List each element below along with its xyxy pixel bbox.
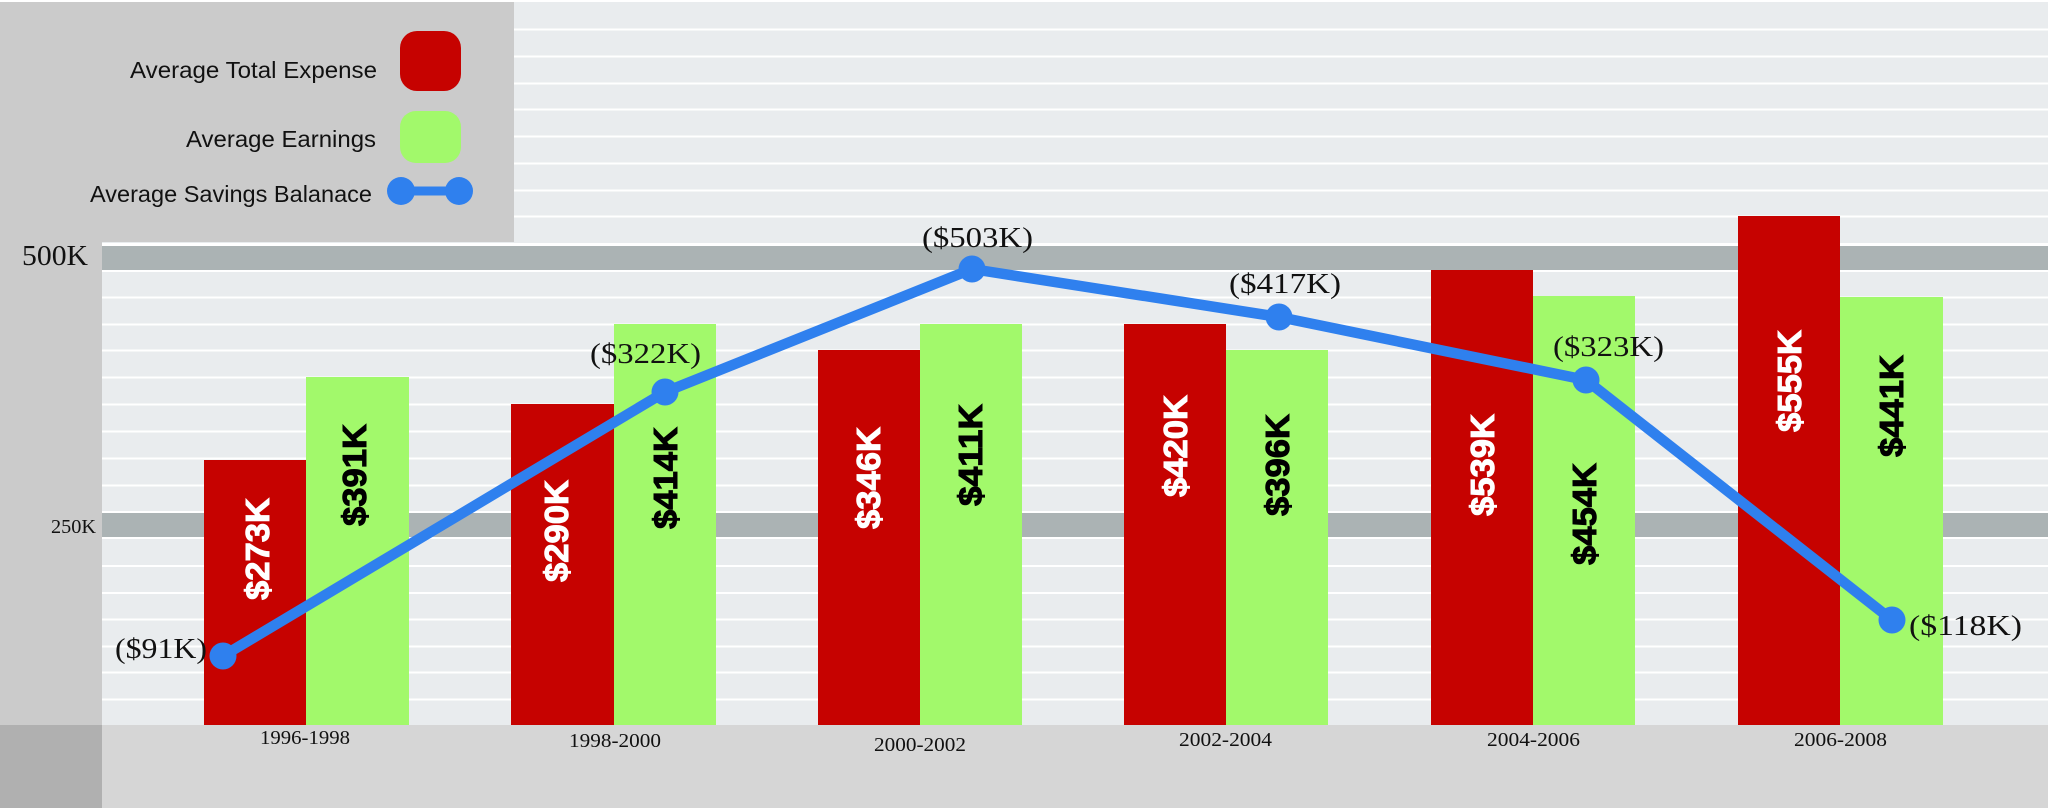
legend: average total expense: Average Total Expense — [130, 57, 377, 83]
line chart: average savings balance — [210, 256, 1906, 670]
bars 2002-2004: $396K — [1259, 414, 1296, 516]
legend: average earnings: Average Earnings — [186, 126, 376, 152]
bars 1998-2000: $290K — [538, 480, 575, 582]
legend: average earnings — [186, 111, 461, 163]
bars 1998-2000 — [511, 324, 716, 725]
bars 2004-2006 — [1431, 270, 1635, 725]
y axis label 500K: 500K — [22, 240, 88, 272]
bars 2004-2006: $539K — [1464, 414, 1501, 516]
panel: legend — [0, 2, 514, 242]
savings labels — [115, 222, 2022, 665]
bars 2000-2002 — [818, 324, 1022, 725]
x axis labels: 2002-2004 — [1179, 729, 1272, 751]
bars 1996-1998: $273K — [239, 498, 276, 600]
bars 2006-2008: $441K — [1873, 355, 1910, 457]
y axis panel — [0, 242, 102, 725]
bars 2000-2002: $346K — [850, 427, 887, 529]
bars 2006-2008 — [1738, 216, 1943, 725]
bars 2000-2002: $411K — [952, 404, 989, 506]
savings labels: ($417K) — [1229, 268, 1341, 300]
bars 1998-2000: $414K — [647, 427, 684, 529]
x axis labels: 2000-2002 — [874, 734, 966, 756]
bars 2002-2004: $420K — [1157, 395, 1194, 497]
x axis labels: 1998-2000 — [569, 730, 661, 752]
legend: average total expense — [130, 31, 461, 91]
savings labels: ($322K) — [590, 338, 701, 370]
y axis label 250K: 250K — [51, 516, 97, 538]
savings labels: ($503K) — [922, 222, 1033, 254]
bars 1996-1998 — [204, 377, 409, 725]
x axis labels: 2006-2008 — [1794, 729, 1887, 751]
x axis labels: 1996-1998 — [260, 727, 350, 749]
x axis labels — [260, 727, 1887, 756]
bars 1996-1998: $391K — [336, 424, 373, 526]
bars 2006-2008: $555K — [1771, 330, 1808, 432]
x axis labels: 2004-2006 — [1487, 729, 1580, 751]
bars 2004-2006: $454K — [1566, 463, 1603, 565]
bar chart — [204, 216, 1943, 725]
axis corner block — [0, 725, 102, 808]
savings labels: ($118K) — [1909, 610, 2022, 642]
legend: average savings balance: Average Savings Balanace — [90, 181, 372, 207]
savings labels: ($323K) — [1553, 331, 1664, 363]
bars 2002-2004 — [1124, 324, 1328, 725]
savings labels: ($91K) — [115, 633, 207, 665]
legend: average savings balance — [90, 177, 473, 207]
x axis strip — [102, 725, 2048, 808]
